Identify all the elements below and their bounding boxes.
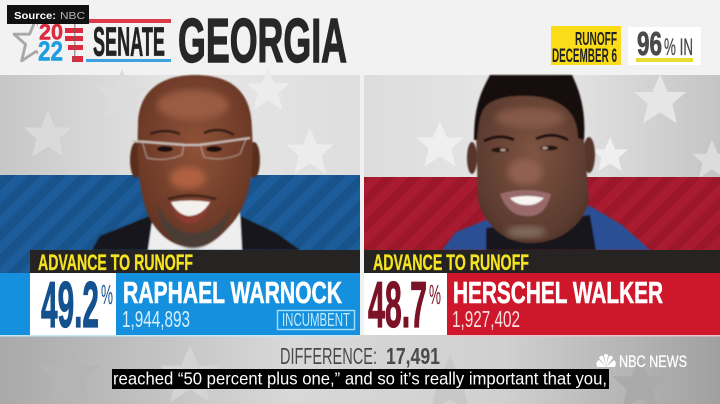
result bar: 48.7	[368, 268, 427, 341]
background stars	[24, 68, 334, 174]
runoff date box: DECEMBER 6	[552, 46, 617, 67]
candidate name: RAPHAEL WARNOCK	[123, 275, 342, 310]
advance to runoff bar: ADVANCE TO RUNOFF	[373, 250, 529, 275]
year: 22	[38, 36, 63, 66]
panel background	[0, 75, 360, 175]
result bar	[364, 268, 720, 341]
year	[38, 20, 64, 66]
advance to runoff bar	[364, 250, 720, 275]
percent reporting box: % IN	[664, 34, 693, 61]
difference text: 17,491	[386, 343, 440, 369]
runoff date box	[551, 26, 621, 67]
advance to runoff bar: ADVANCE TO RUNOFF	[38, 250, 193, 275]
heading: Georgia: GEORGIA	[178, 6, 347, 76]
icon: flag stripes	[65, 24, 83, 62]
percent reporting box: 96	[637, 25, 662, 62]
photo: Herschel Walker	[442, 75, 650, 250]
hair	[474, 75, 584, 140]
incumbent tag: INCUMBENT	[282, 310, 350, 330]
photo: Raphael Warnock	[92, 75, 300, 250]
source label: NBC	[60, 10, 85, 22]
caption: reached “50 percent plus one,” and so it’s really important that you,	[113, 368, 607, 388]
result bar	[0, 268, 360, 341]
result bar: %	[101, 279, 113, 310]
glasses	[132, 138, 250, 159]
red rule	[89, 19, 171, 23]
icon: star outline	[14, 19, 58, 61]
vote count: 1,944,893	[122, 306, 190, 332]
blue rule	[86, 59, 171, 62]
blue striped band	[0, 175, 360, 273]
icon: NBC News logo: NBC NEWS	[619, 352, 687, 371]
icon: NBC News logo	[596, 352, 687, 371]
source label: Source:	[14, 10, 56, 22]
panel: Walker	[364, 74, 720, 341]
bottom background	[0, 335, 720, 404]
percent reporting box	[628, 25, 701, 65]
result bar: %	[429, 279, 441, 310]
incumbent tag	[278, 310, 354, 330]
background stars	[416, 74, 720, 178]
red striped band	[364, 177, 720, 273]
panel background	[364, 75, 720, 177]
source label	[7, 5, 89, 24]
year: 20	[39, 20, 63, 44]
vote count: 1,927,402	[452, 306, 520, 332]
result bar: 49.2	[41, 268, 99, 341]
header background	[0, 0, 720, 75]
difference text: DIFFERENCE:	[280, 343, 377, 369]
panel: Warnock	[0, 68, 360, 341]
icon: peacock	[596, 354, 616, 367]
logo: 2022 senate	[14, 18, 171, 66]
text: SENATE	[93, 18, 165, 64]
runoff date box: RUNOFF	[575, 29, 617, 49]
